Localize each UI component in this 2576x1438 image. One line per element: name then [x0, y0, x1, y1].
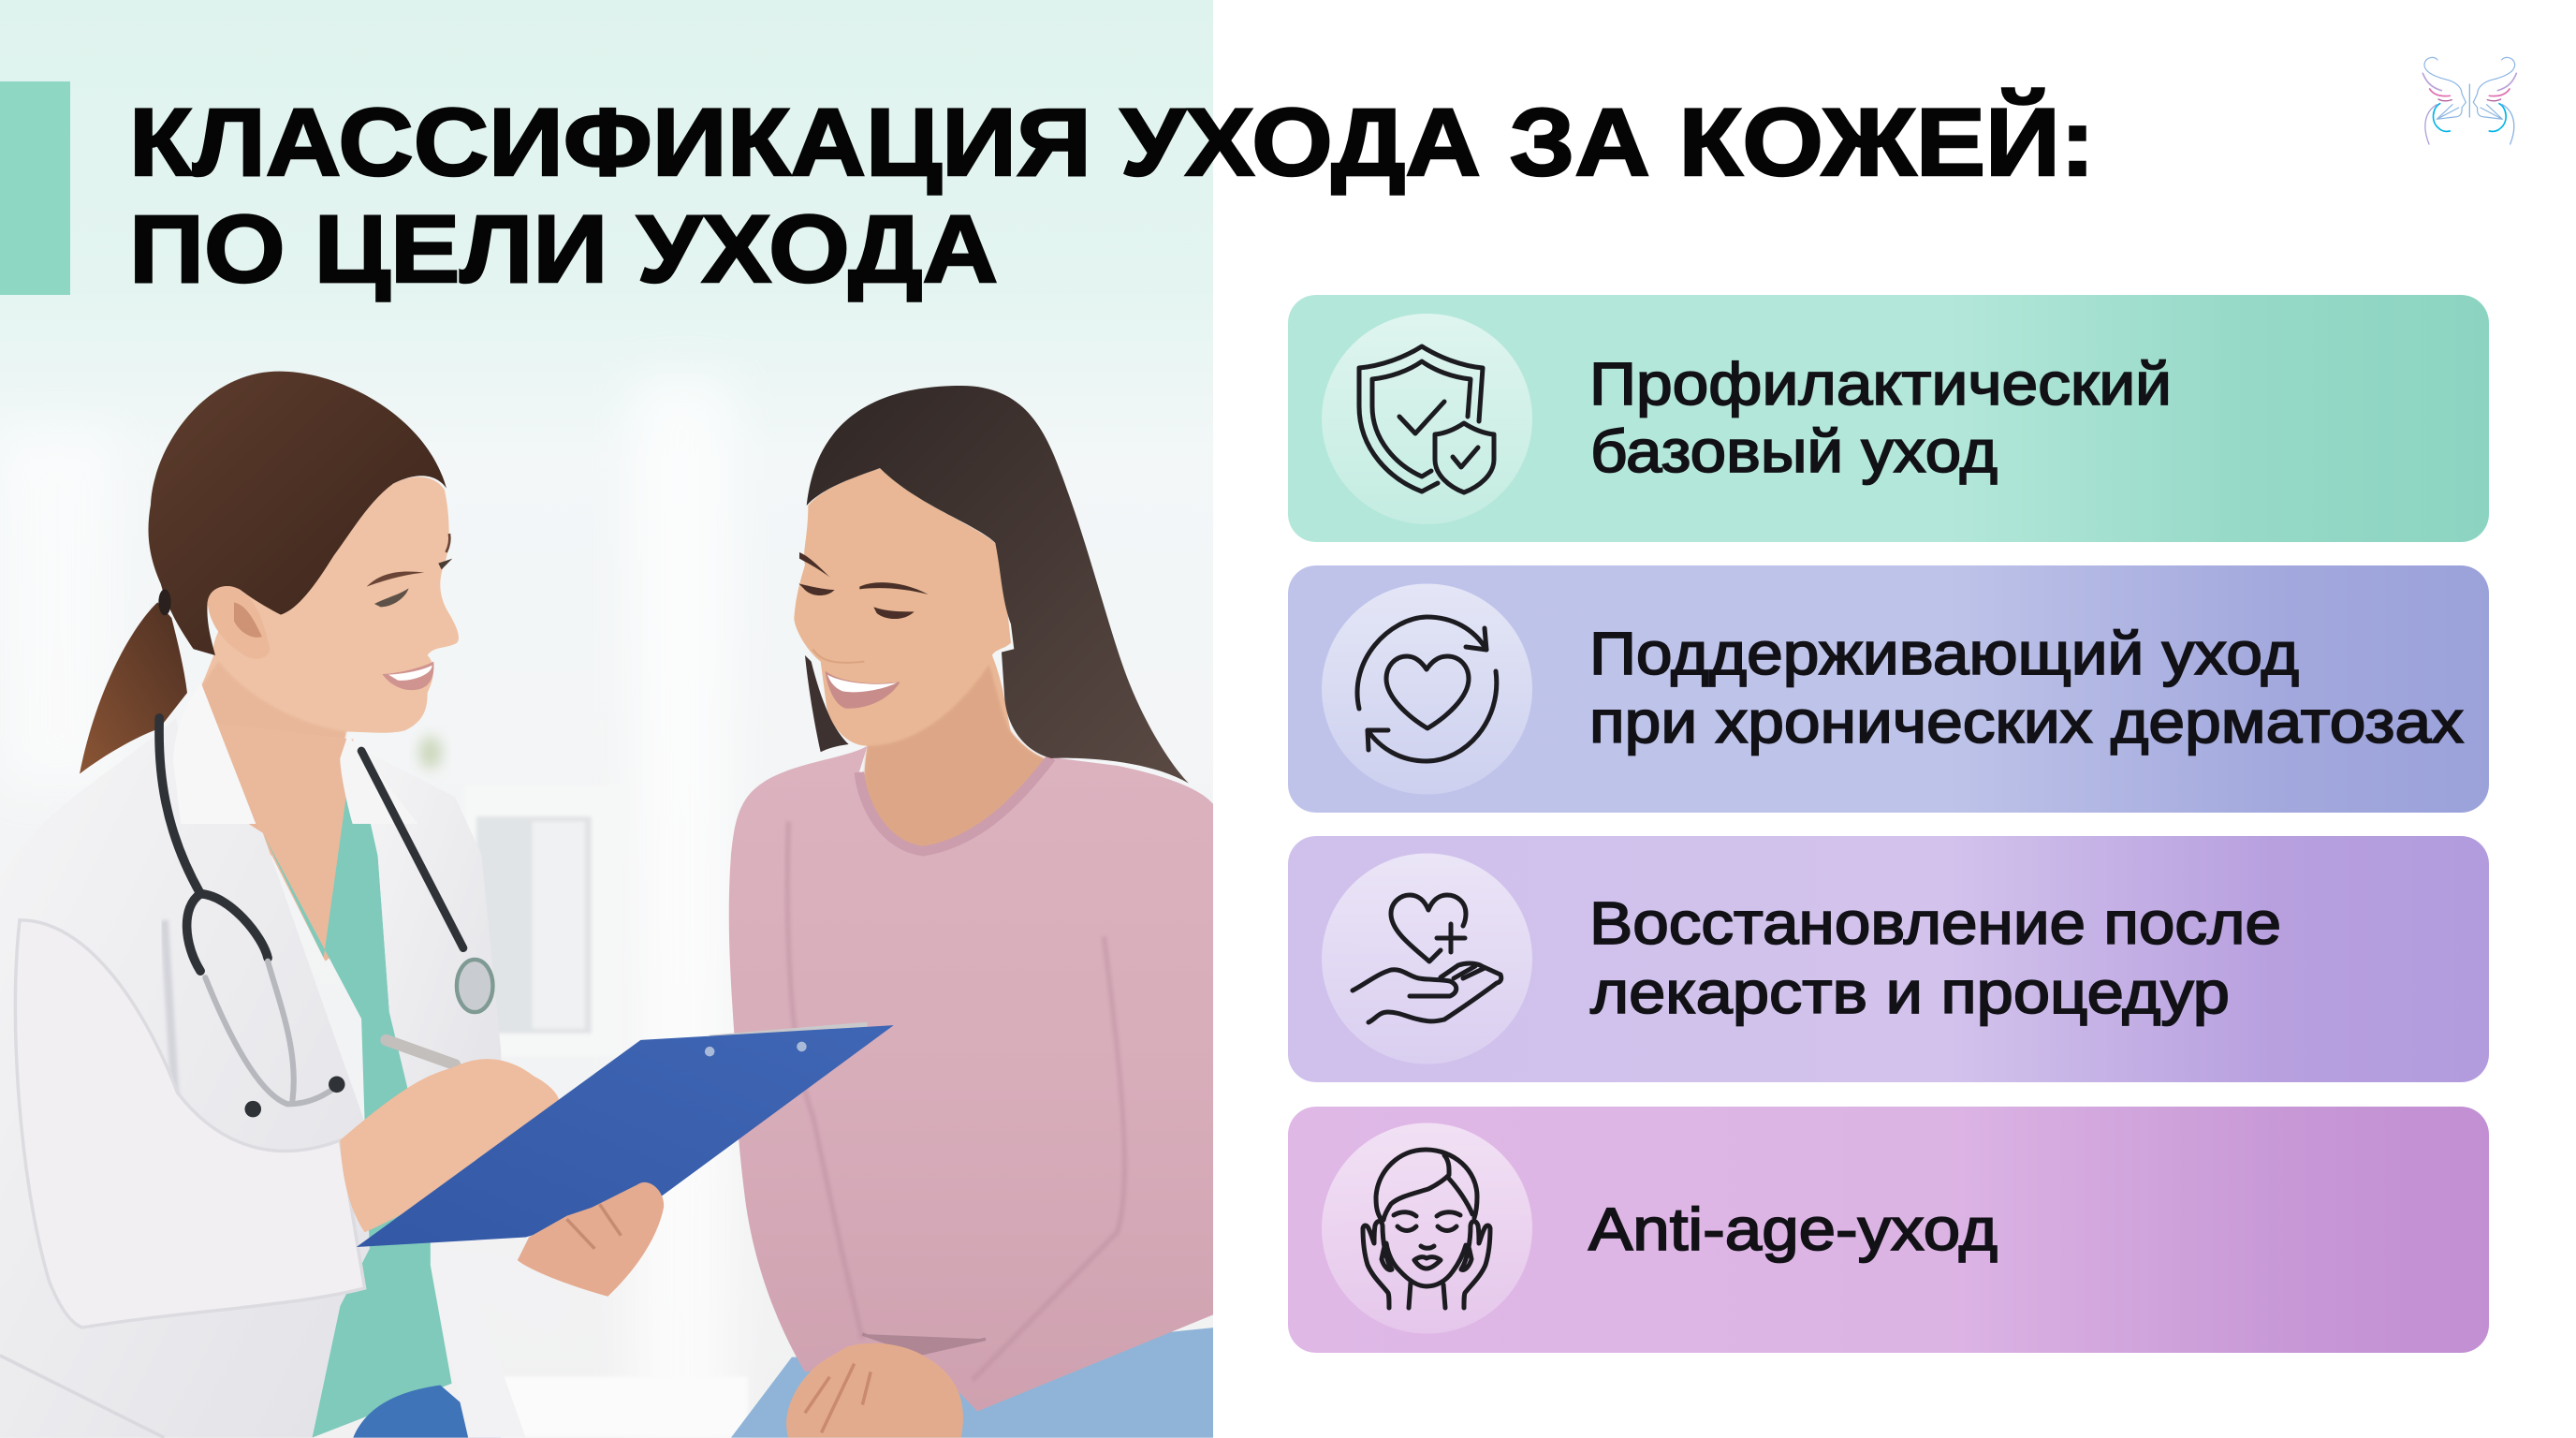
- stethoscope: [159, 718, 492, 1117]
- title line 1: КЛАССИФИКАЦИЯ УХОДА ЗА КОЖЕЙ:: [129, 88, 2095, 196]
- doctor hand holding clipboard: [518, 1182, 664, 1297]
- doctor face: [201, 477, 459, 855]
- patient: [729, 386, 1214, 1438]
- doctor ear: [208, 586, 270, 659]
- panel: card 3 recovery: [1288, 836, 2489, 1082]
- patient clasped hands: [786, 1343, 963, 1438]
- doctor hair: [148, 372, 446, 655]
- card 2 text: [1589, 620, 2464, 756]
- card 3 text: лекарств и процедур: [1590, 959, 2230, 1026]
- patient jeans: [731, 1328, 1214, 1438]
- logo left wing: [2422, 57, 2466, 144]
- title line 2: ПО ЦЕЛИ УХОДА: [129, 196, 998, 302]
- card 1 text: базовый уход: [1590, 418, 1998, 485]
- doctor chest skin: [271, 738, 354, 961]
- icon: heart in cycle arrows: [1357, 617, 1497, 761]
- card 2 text: Поддерживающий уход: [1589, 620, 2299, 687]
- card 4 text: Anti-age-уход: [1588, 1196, 1998, 1263]
- card 1 text: [1589, 350, 2172, 485]
- pen: [386, 1040, 455, 1064]
- patient sweater: [729, 746, 1214, 1412]
- doctor hair tie: [158, 589, 171, 615]
- logo right wing: [2473, 57, 2516, 144]
- doctor ponytail: [80, 602, 187, 774]
- accent bar: [0, 81, 70, 295]
- doctor writing hand: [340, 1059, 559, 1232]
- icon: face with hands: [1363, 1150, 1490, 1308]
- patient face and neck: [794, 468, 1051, 861]
- doctor: [0, 372, 894, 1438]
- panel: card 1 preventive care: [1288, 295, 2489, 542]
- card 3 text: [1589, 889, 2281, 1026]
- icon: shields with check marks: [1359, 346, 1494, 492]
- doctor white coat: [0, 813, 524, 1438]
- logo: butterfly: [2422, 57, 2516, 144]
- doctor sleeve: [15, 920, 365, 1328]
- photo background: clinic room: [0, 378, 748, 1438]
- card 3 text: Восстановление после: [1589, 889, 2281, 957]
- card 1 text: Профилактический: [1589, 350, 2172, 418]
- panel: photo of doctor and patient: [0, 0, 1214, 1438]
- title: [129, 88, 2095, 302]
- card 2 text: при хронических дерматозах: [1589, 688, 2464, 756]
- panel: card 2 supportive care: [1288, 565, 2489, 813]
- panel: card 4 anti-age: [1288, 1107, 2489, 1353]
- doctor scrubs: [263, 746, 501, 1438]
- icon: heart with plus over open hand: [1353, 895, 1501, 1022]
- patient left hair strands: [805, 655, 849, 752]
- doctor collar: [183, 683, 371, 824]
- patient hair: [807, 386, 1189, 784]
- clipboard: [357, 1022, 894, 1247]
